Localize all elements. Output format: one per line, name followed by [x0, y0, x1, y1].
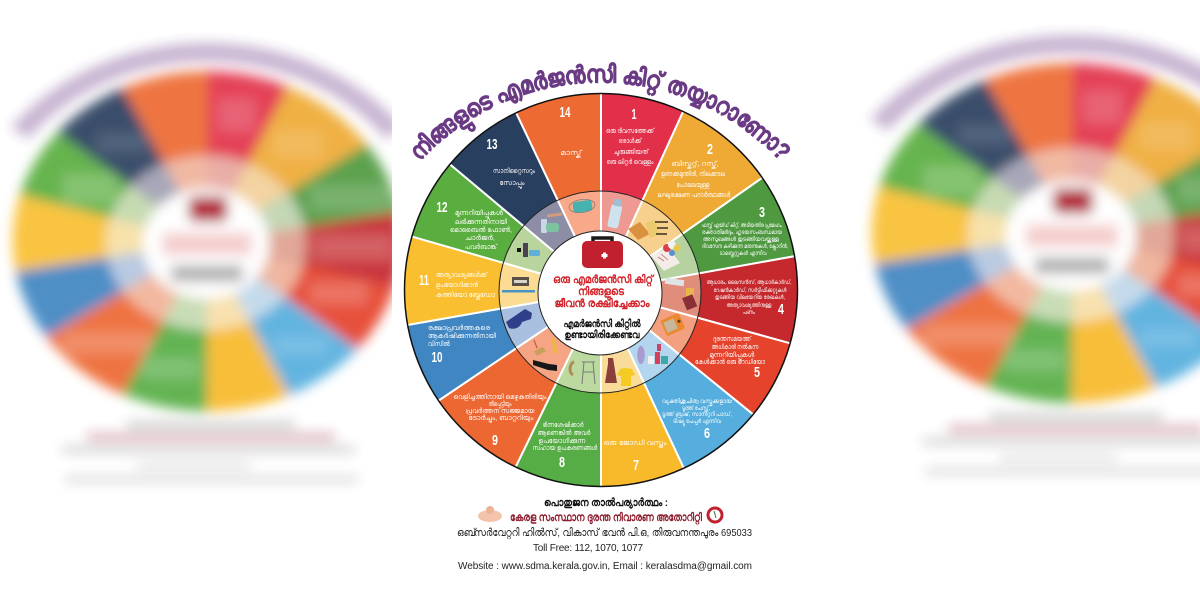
center message: ഒരു എമർജൻസി കിറ്റ്	[553, 273, 655, 287]
icon: documents and passport	[665, 278, 697, 310]
segment 4: documents	[698, 255, 797, 342]
footer	[457, 496, 752, 572]
icon: blade	[502, 277, 535, 292]
center circle	[538, 231, 662, 355]
segment 5: radio	[680, 316, 790, 413]
segment 10: whistle: രക്ഷാപ്രവർത്തകരെ	[428, 323, 491, 332]
address: ഒബ്സർവേറ്ററി ഹിൽസ്, വികാസ് ഭവൻ പി.ഒ, തിരുവനന്തപുരം 695033	[457, 527, 752, 540]
icon: phone, charger and power bank	[517, 243, 540, 257]
segment 6: toiletries: ടൂത്ത് പേസ്റ്റ്,	[682, 405, 710, 413]
segment 7: clothes: ഒരു ജോഡി വസ്ത്രം	[604, 438, 668, 449]
blurred background copy: left	[2, 35, 392, 488]
segment 10: whistle: ആകർഷിക്കുന്നതിനായി	[428, 331, 496, 340]
segment 8: mobility aids: ആണെങ്കിൽ അവർ	[538, 428, 591, 437]
segment 6: toiletries: ടൂത്ത് ബ്രഷ്, സാനിറ്ററി പാഡ്,	[662, 410, 732, 418]
segment 8: mobility aids: 8	[559, 454, 565, 471]
segment 13: sanitizer: സാനിറ്റൈസറും	[493, 166, 536, 176]
segment 1: water: ഒരു ദിവസത്തേക്ക്	[606, 126, 655, 135]
segment 6: toiletries: 6	[704, 425, 710, 442]
segment 9: torch: ടോർച്ചും, ബാറ്ററിയും	[468, 413, 535, 424]
segment 7: clothes: 7	[633, 457, 639, 474]
segment 11: knife	[405, 238, 502, 326]
center message: നിങ്ങളുടെ	[578, 285, 624, 301]
segment 12: phone: മുന്നറിയിപ്പുകൾ	[455, 208, 504, 219]
segment 6: toiletries: ടിഷ്യു പേപ്പർ എന്നിവ	[673, 417, 721, 426]
authority name: കേരള സംസ്ഥാന ദുരന്ത നിവാരണ അതോറിറ്റി	[510, 511, 702, 525]
segment 9: torch: പ്രവർത്തന സജ്ജമായ	[466, 406, 535, 415]
segment 11: knife: 11	[419, 272, 429, 289]
segment 5: radio: കേൾക്കാൻ ഒരു റേഡിയോ	[695, 357, 765, 366]
segment 4: documents: തുടങ്ങിയ വിലയേറിയ രേഖകൾ,	[715, 293, 785, 301]
segment 8: mobility aids: ഉപയോഗിക്കുന്ന	[538, 436, 586, 445]
footer heading: പൊതുജന താൽപര്യാർത്ഥം :	[544, 496, 668, 510]
segment 12: phone: പവർബാങ്ക്	[465, 242, 498, 251]
segment 7: clothes	[602, 383, 684, 486]
segment 3: first aid	[682, 178, 794, 272]
segment 12: phone: ലഭിക്കുന്നതിനായി	[455, 217, 507, 226]
segment 5: radio: 5	[754, 364, 760, 381]
segment 2: food: ബിസ്കറ്റ്, റസ്ക്,	[672, 159, 718, 170]
segment 3: first aid: അസുഖങ്ങൾ തുടങ്ങിയവയ്ക്കുള്ള	[703, 235, 779, 244]
segment 1: water	[602, 94, 682, 200]
center subheading	[564, 317, 641, 341]
segment 1: water: ഒരു ലിറ്റർ വെള്ളം	[606, 157, 654, 167]
icon: sanitizer and soap	[541, 214, 562, 233]
title: നിങ്ങളുടെ എമർജൻസി കിറ്റ് തയ്യാറാണോ?	[412, 62, 790, 159]
segment 4: documents: പണം	[743, 309, 755, 316]
outer ring outline	[404, 94, 798, 486]
segment 3: first aid: 3	[759, 204, 765, 221]
icon: hearing aid and walker	[570, 362, 595, 384]
segment 4: documents: 4	[778, 301, 784, 318]
segment 5: radio: മുന്നറിയിപ്പുകൾ	[710, 350, 755, 361]
icon: dress and t-shirt	[605, 358, 635, 386]
emergency kit wheel	[404, 92, 798, 488]
icon: whistle	[506, 309, 532, 329]
segment 14: mask: 14	[560, 104, 571, 121]
segment 12: phone: 12	[436, 199, 448, 216]
segment 9: torch: വെളിച്ചത്തിനായി മെഴുകുതിരിയും	[454, 392, 547, 402]
segment 12: phone	[412, 166, 522, 264]
segment 11: knife: ഉപയോഗിക്കാൻ	[436, 280, 479, 289]
segment 6: toiletries	[645, 354, 754, 467]
icon: state emblem	[478, 506, 502, 522]
icon: medicines	[651, 241, 680, 271]
segment 2: food: 2	[707, 141, 713, 158]
segment 11: knife: അത്യാവശ്യങ്ങൾക്ക്	[436, 270, 488, 279]
segment 6: toiletries: വ്യക്തിശുചിത്വ വസ്തുക്കളായ	[662, 397, 733, 407]
segment 4: documents: ആധാരം, ലൈസൻസ്, ആധാർകാർഡ്,	[706, 279, 792, 286]
segment 9: torch: 9	[492, 432, 498, 449]
segment 4: documents: റേഷൻകാർഡ്, സർട്ടിഫിക്കറ്റുകൾ	[714, 286, 787, 294]
segment 8: mobility aids: ഭിന്നശേഷിക്കാർ	[542, 420, 584, 429]
website and email: Website : www.sdma.kerala.gov.in, Email : keralasdma@gmail.com	[458, 561, 752, 572]
center message	[553, 273, 655, 310]
segment 3: first aid: ഫസ്റ്റ് എയ്ഡ് കിറ്റ്, അടിയന്തിര പ്രമേഹം,	[702, 221, 783, 230]
segment 12: phone: മൊബൈൽ ഫോൺ,	[450, 225, 512, 234]
segment 14: mask	[516, 94, 600, 200]
segment 3: first aid: ദിവസേന കഴിക്കുന്ന മരുന്നുകൾ, ക്ലോറിൻ,	[702, 242, 788, 251]
segment 14: mask: മാസ്ക്	[560, 148, 583, 159]
segment 5: radio: ദുരന്തസമയത്ത്	[713, 334, 752, 344]
blurred background copy: right	[862, 27, 1200, 480]
icon: water bottle	[607, 198, 624, 229]
segment 13: sanitizer: സോപ്പും	[500, 178, 525, 189]
segment 10: whistle: വിസിൽ	[428, 339, 450, 348]
segment 10: whistle	[408, 310, 516, 401]
icon: radio	[660, 313, 685, 336]
segment 5: radio: അധികാരി നൽകുന്ന	[712, 342, 759, 351]
center subheading: ഉണ്ടായിരിക്കേണ്ടവ	[564, 328, 640, 341]
segment 4: documents: അത്യാവശ്യത്തിനുള്ള	[726, 301, 772, 309]
segment 8: mobility aids	[517, 384, 600, 486]
icon: face mask	[568, 198, 596, 214]
icon: food packets	[628, 220, 668, 240]
segment 9: torch	[440, 350, 557, 467]
segment 9: torch: തീപ്പെട്ടിയും	[488, 399, 512, 409]
segment 3: first aid: ടാബ്ലെറ്റുകൾ എന്നിവ	[720, 249, 767, 258]
icon: torch and matches	[533, 338, 558, 371]
segment 1: water: ഒരാൾക്ക്	[618, 136, 643, 145]
toll free: Toll Free: 112, 1070, 1077	[533, 543, 643, 554]
segment 12: phone: ചാർജർ,	[465, 233, 495, 242]
segment 2: food: ലഘുഭക്ഷണ പദാർത്ഥങ്ങൾ	[658, 190, 731, 200]
segment 13: sanitizer: 13	[486, 136, 498, 153]
segment 13: sanitizer	[450, 114, 557, 226]
segment 2: food	[642, 112, 761, 232]
segment 2: food: പോലെയുള്ള	[676, 180, 710, 190]
segment 2: food: ഉണക്കമുന്തിരി, നിലക്കടല	[661, 169, 726, 179]
icon: red first aid bag	[582, 238, 623, 268]
center message: ജീവൻ രക്ഷിച്ചേക്കാം	[554, 297, 650, 310]
segment 1: water: ചുരുങ്ങിയത്	[614, 147, 650, 157]
icon: toiletries	[637, 344, 668, 364]
segment 8: mobility aids: സഹായ ഉപകരണങ്ങൾ	[532, 443, 598, 452]
segment 10: whistle: 10	[432, 349, 442, 366]
segment 3: first aid: രക്താതിമർദ്ദം, ഹൃദയസംബന്ധമായ	[702, 228, 783, 236]
icon: authority logo	[708, 508, 722, 522]
segment 1: water: 1	[632, 106, 636, 123]
inner ring of item tiles	[500, 192, 700, 392]
segment 11: knife: കത്തിയോ ബ്ലേഡോ	[436, 290, 495, 301]
center subheading: എമർജൻസി കിറ്റിൽ	[564, 317, 641, 331]
